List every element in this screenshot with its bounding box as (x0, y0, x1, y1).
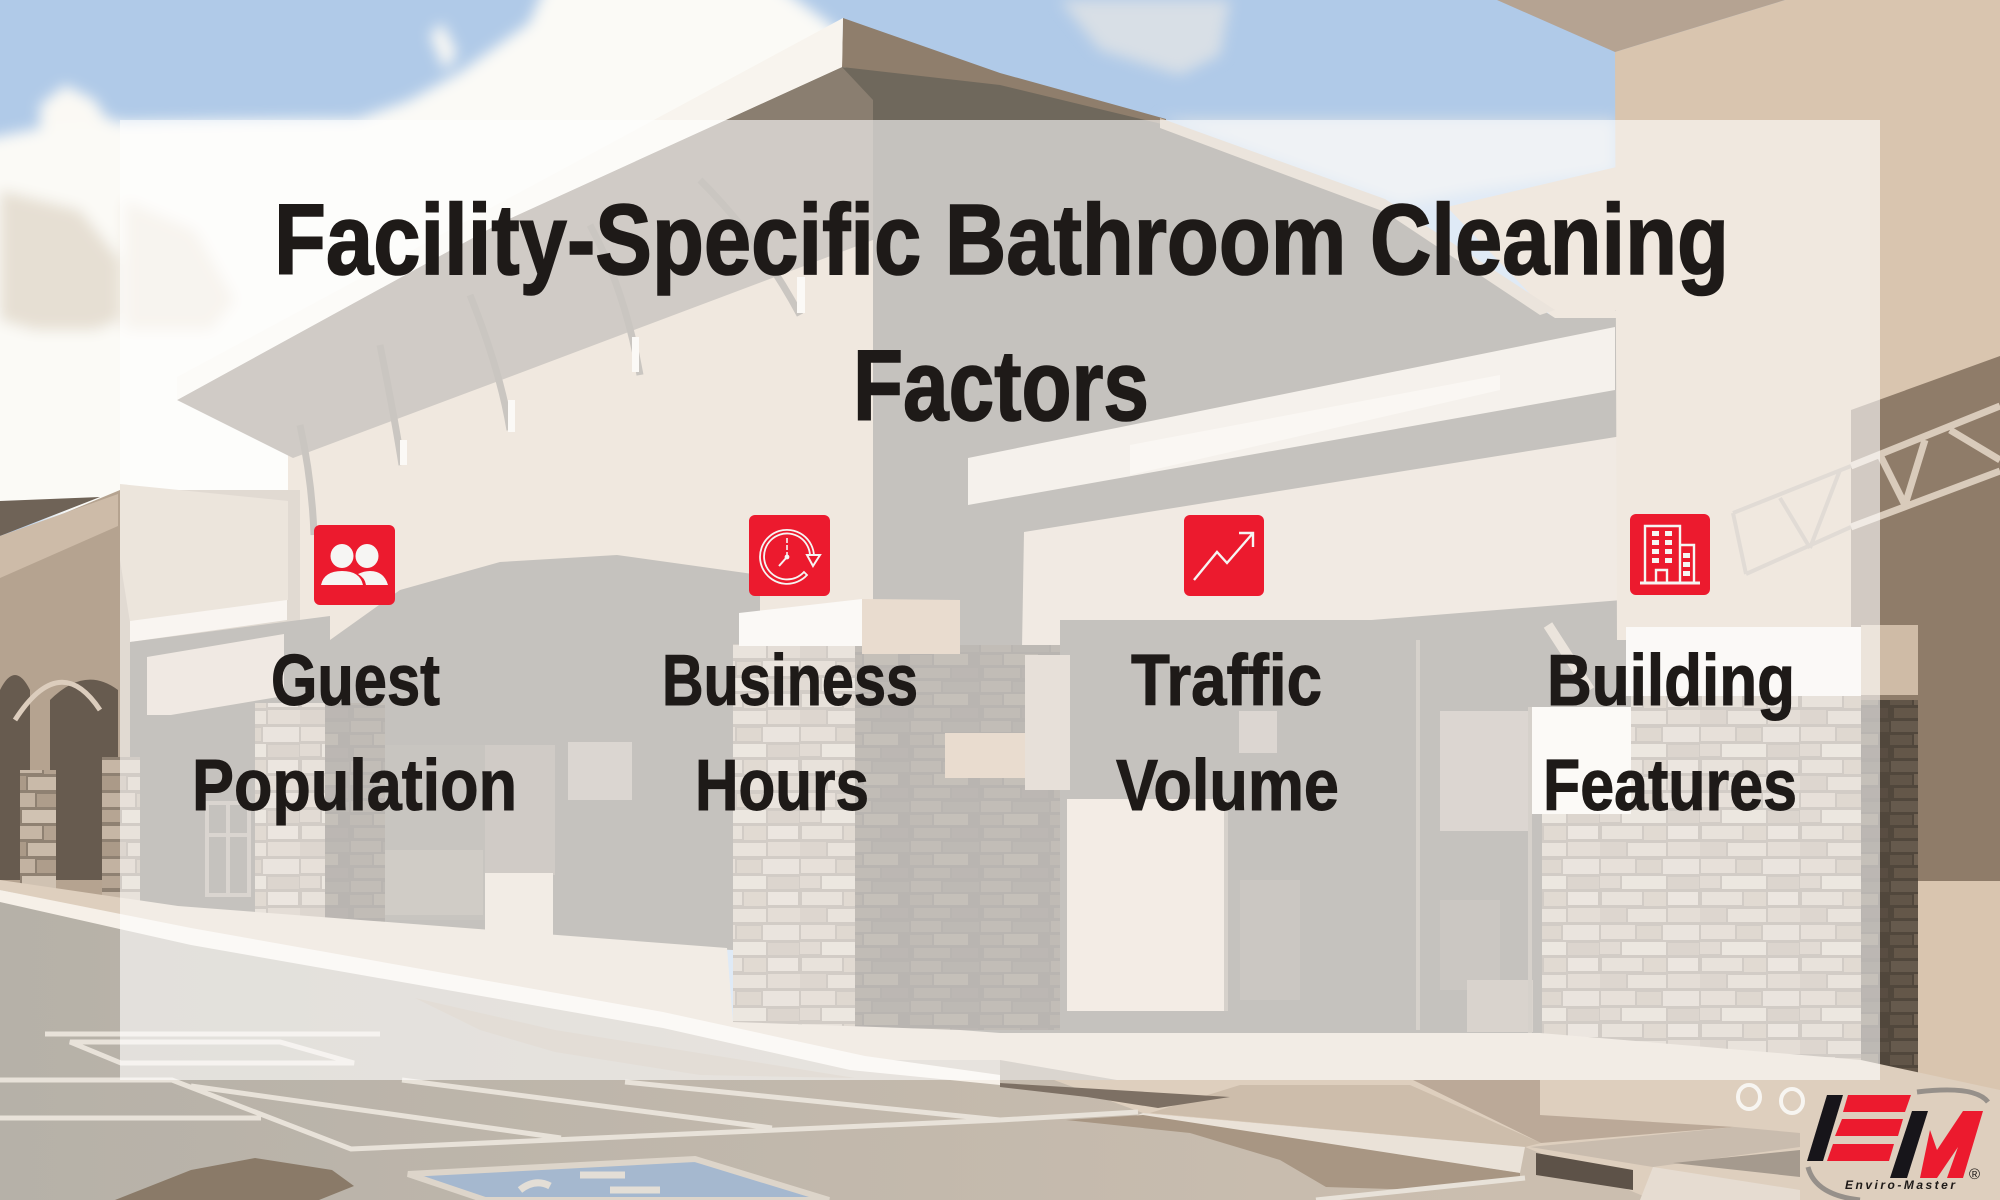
label (192, 641, 517, 826)
factor: Traffic Volume (1116, 515, 1339, 826)
label: Building (1547, 641, 1795, 721)
left soffit and fascia (177, 67, 873, 458)
icon: people (314, 525, 395, 605)
right upper roof (1447, 165, 1625, 320)
left buildings (0, 490, 300, 900)
truss (1851, 406, 2000, 527)
label: Traffic (1131, 641, 1322, 721)
label (1543, 641, 1797, 826)
stained gutter (415, 998, 855, 1078)
awning (968, 327, 1615, 505)
right wall and overhang (1615, 0, 2000, 640)
left stone pillar (325, 703, 385, 943)
parking lines (0, 1034, 1525, 1200)
curb (0, 890, 1000, 1085)
oil stain (115, 1158, 354, 1200)
sidewalk (0, 880, 2000, 1200)
middle stone pillar (855, 645, 1060, 1030)
factor: Business Hours (662, 515, 918, 826)
label: Features (1543, 746, 1797, 826)
icon: rising chart arrow (1184, 515, 1264, 596)
title: Factors (853, 330, 1149, 442)
label (662, 641, 918, 826)
icon: office building (1630, 514, 1710, 595)
label: Guest (271, 641, 440, 721)
factor: Guest Population (192, 525, 517, 826)
grate (1000, 1083, 1230, 1108)
title: Facility-Specific Bathroom Cleaning (274, 184, 1729, 296)
decorative carousel rings (1738, 1085, 1803, 1113)
label: Volume (1116, 746, 1339, 826)
factor: Building Features (1543, 514, 1797, 826)
icon: clock (749, 515, 830, 596)
storefront under arch (140, 555, 760, 1030)
label: Hours (695, 746, 869, 826)
translucent white panel (120, 120, 1880, 1080)
ground (0, 885, 2000, 1200)
label: Business (662, 641, 918, 721)
right stone pillar (1861, 700, 1918, 1100)
ramp (1530, 1127, 1800, 1167)
logo: Enviro-Master: ® (1969, 1166, 1980, 1183)
label (1116, 641, 1339, 826)
shaded base behind storefronts (873, 400, 1633, 1040)
title (274, 184, 1729, 442)
main wall (288, 120, 873, 700)
logo: Enviro-Master (1807, 1090, 1988, 1200)
handicap bay (408, 1159, 829, 1200)
logo: Enviro-Master: Enviro-Master (1845, 1178, 1956, 1192)
lit wall panel (1022, 436, 1622, 648)
gable shadow (842, 67, 1625, 600)
label: Population (192, 746, 517, 826)
central storefront (1060, 620, 1540, 1033)
